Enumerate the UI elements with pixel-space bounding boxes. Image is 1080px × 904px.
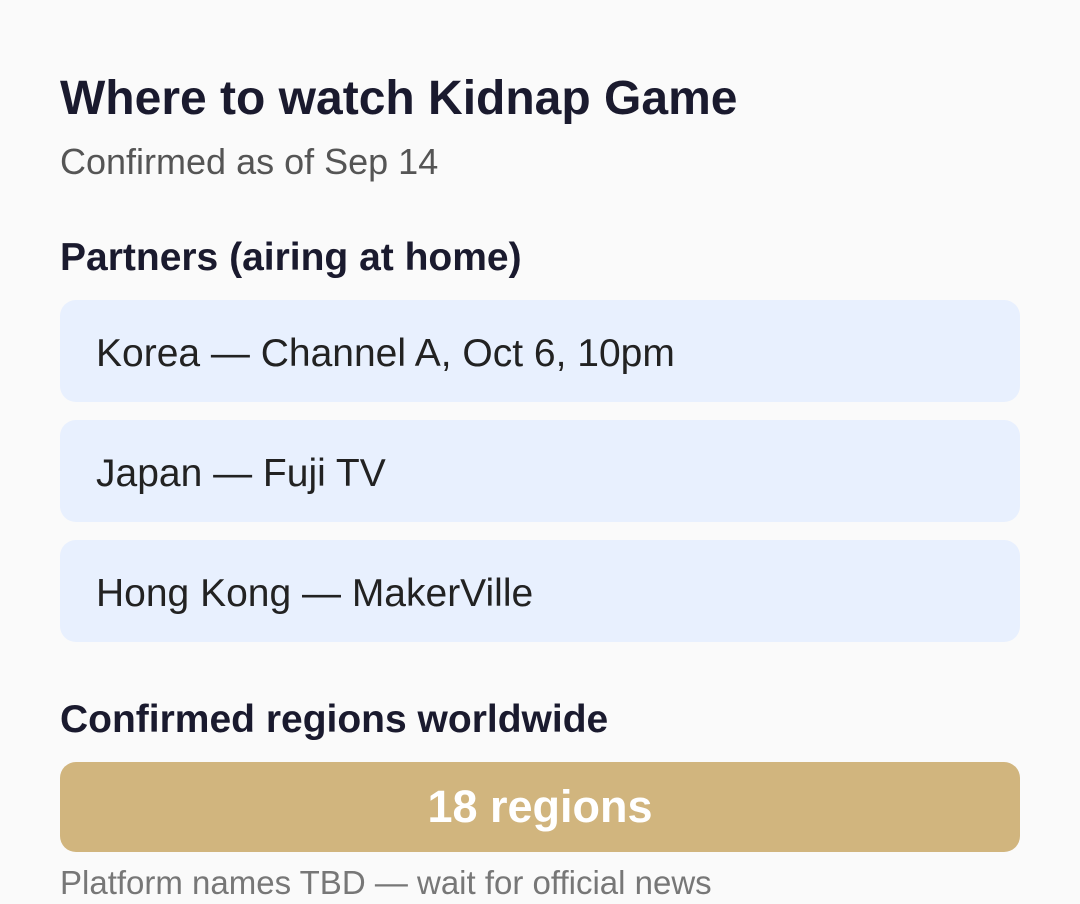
heading: partners: Partners (airing at home) (60, 236, 522, 279)
panel: Korea partner (60, 300, 1020, 402)
callout: 18 regions: 18 regions (427, 781, 653, 832)
callout: 18 regions (60, 762, 1020, 852)
panel: Hong Kong partner (60, 540, 1020, 642)
panel: Hong Kong partner: Hong Kong — MakerVille (96, 572, 533, 615)
footnote: Platform names TBD — wait for official news (60, 864, 712, 901)
panel: Japan partner: Japan — Fuji TV (96, 452, 386, 495)
panel: Korea partner: Korea — Channel A, Oct 6, 10pm (96, 332, 675, 375)
title: Where to watch Kidnap Game (60, 72, 737, 125)
panel: Japan partner (60, 420, 1020, 522)
heading: confirmed regions: Confirmed regions worldwide (60, 698, 608, 741)
subtitle: Confirmed as of Sep 14 (60, 141, 438, 182)
